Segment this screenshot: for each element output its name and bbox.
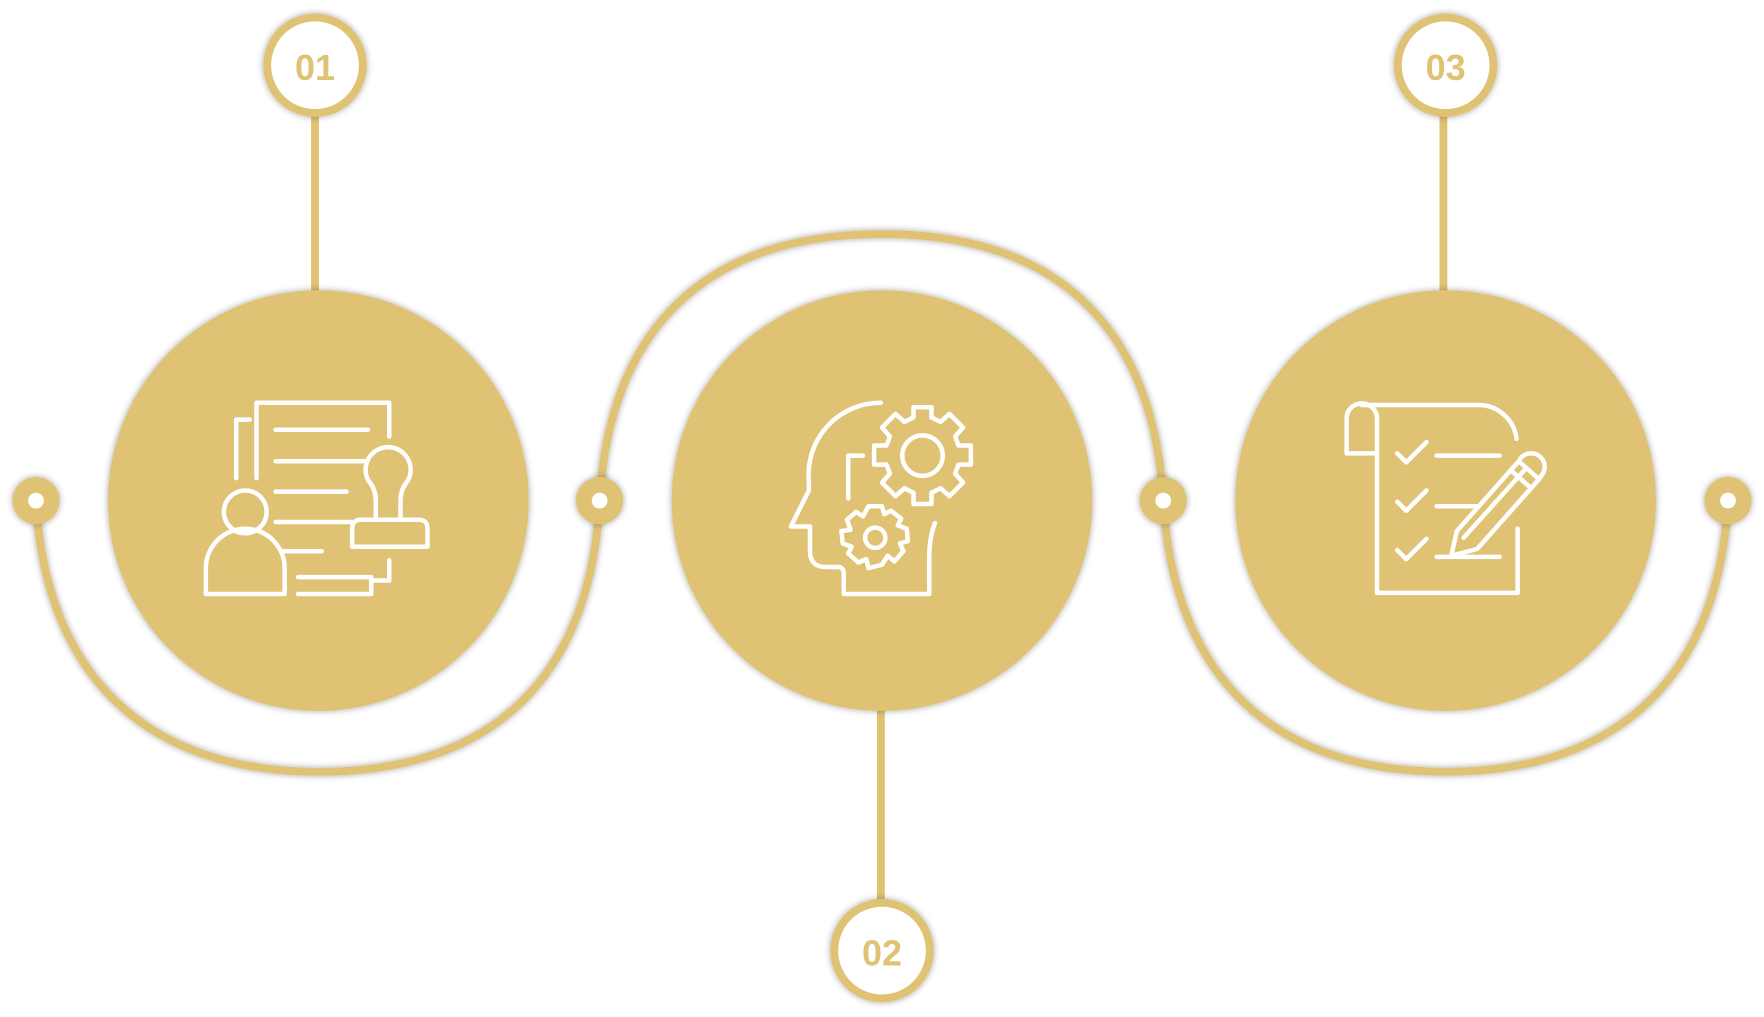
connector dots <box>12 477 1752 524</box>
wave connector <box>36 234 1728 772</box>
badge 03 <box>1394 14 1497 117</box>
badge 02 <box>830 899 934 1002</box>
badge 01: 01 <box>295 47 335 88</box>
step 3 circle <box>1235 290 1656 711</box>
step 2 circle <box>672 290 1092 711</box>
icon: checklist with pencil <box>1347 403 1545 593</box>
badge 01 <box>263 14 367 117</box>
icon: head with gears <box>791 403 971 594</box>
badge 02: 02 <box>862 932 902 973</box>
connector stems <box>315 112 1443 906</box>
icon: document with person and stamp <box>206 403 428 594</box>
badge 03: 03 <box>1426 47 1466 88</box>
step 1 circle <box>108 290 529 711</box>
